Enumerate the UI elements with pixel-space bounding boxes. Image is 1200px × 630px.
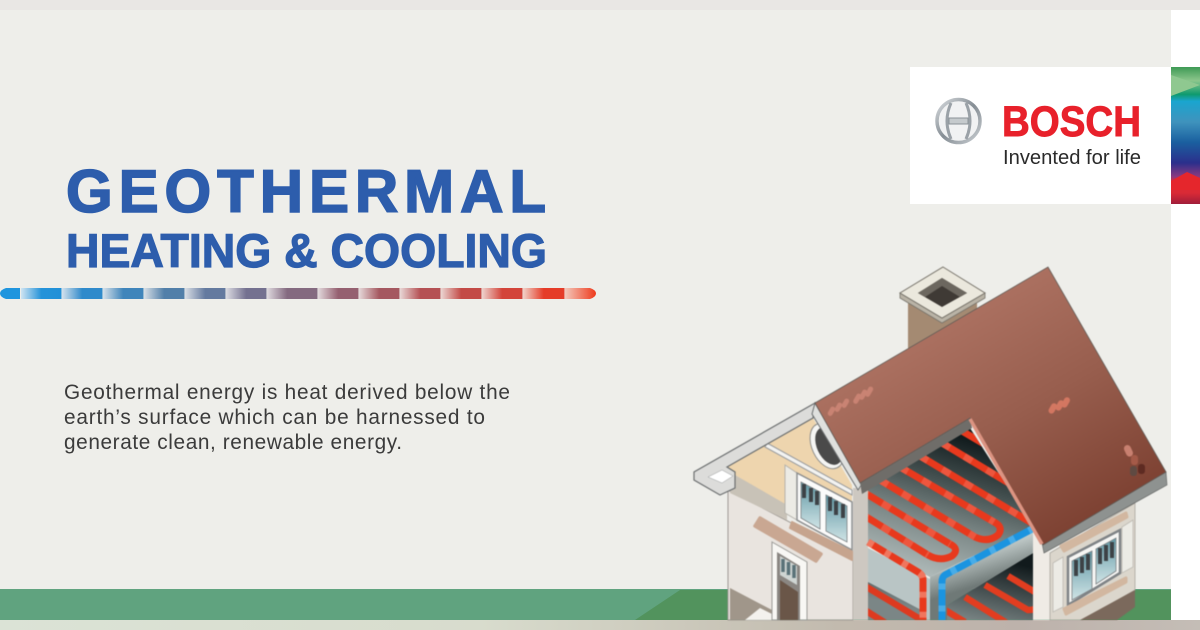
gable trim bbox=[765, 443, 852, 495]
front door bbox=[772, 542, 807, 620]
colour ribbon bbox=[1171, 67, 1200, 204]
right margin bbox=[1171, 10, 1200, 67]
roof fascia bbox=[860, 418, 1167, 553]
corner post bbox=[853, 488, 868, 620]
chimney bbox=[900, 267, 985, 350]
left wing foundation bbox=[730, 588, 772, 620]
lower heated floor bbox=[867, 552, 1034, 621]
title bbox=[66, 158, 547, 277]
left upper window bbox=[785, 465, 855, 560]
title: GEOTHERMAL bbox=[66, 158, 546, 225]
pipe highlights bbox=[868, 442, 1018, 558]
supply riser: red pipe bbox=[868, 542, 923, 620]
gable shadow band bbox=[730, 475, 787, 520]
floor slab: right face bbox=[930, 528, 1033, 620]
icon: Bosch armature ring bbox=[937, 100, 980, 142]
upper heated floor bbox=[867, 428, 1030, 578]
roof bbox=[815, 267, 1166, 545]
description text: Geothermal energy is heat derived below the bbox=[64, 381, 510, 404]
underfloor heating loop: red pipes bbox=[860, 431, 1045, 559]
brand name: BOSCH bbox=[1002, 98, 1141, 146]
right window bbox=[1053, 513, 1133, 614]
roof valley highlight bbox=[970, 419, 1042, 544]
return line: blue pipe bbox=[942, 528, 1034, 620]
description text: generate clean, renewable energy. bbox=[64, 431, 402, 454]
logo panel bbox=[910, 67, 1171, 204]
temperature gradient bar bbox=[0, 288, 596, 299]
top strip bbox=[0, 0, 1200, 10]
round attic window bbox=[803, 418, 851, 474]
ground: green lawn bbox=[0, 589, 1171, 620]
roof vents bbox=[827, 386, 1071, 417]
front step bbox=[745, 608, 772, 620]
roof pipe cluster bbox=[1123, 444, 1145, 476]
floor slab: left face bbox=[868, 548, 930, 620]
description text bbox=[64, 381, 510, 454]
left wing wall bbox=[728, 490, 853, 620]
gable infill bbox=[727, 418, 852, 507]
title: HEATING & COOLING bbox=[66, 224, 547, 277]
gable rake trim bbox=[812, 403, 862, 490]
left eave bbox=[694, 403, 815, 495]
description text: earth’s surface which can be harnessed to bbox=[64, 406, 485, 429]
right wing side wall bbox=[1033, 503, 1135, 620]
bottom strip bbox=[0, 620, 1200, 630]
illustration: cutaway house bbox=[694, 267, 1167, 630]
tagline: Invented for life bbox=[1003, 147, 1141, 169]
door lintel bbox=[755, 518, 821, 561]
